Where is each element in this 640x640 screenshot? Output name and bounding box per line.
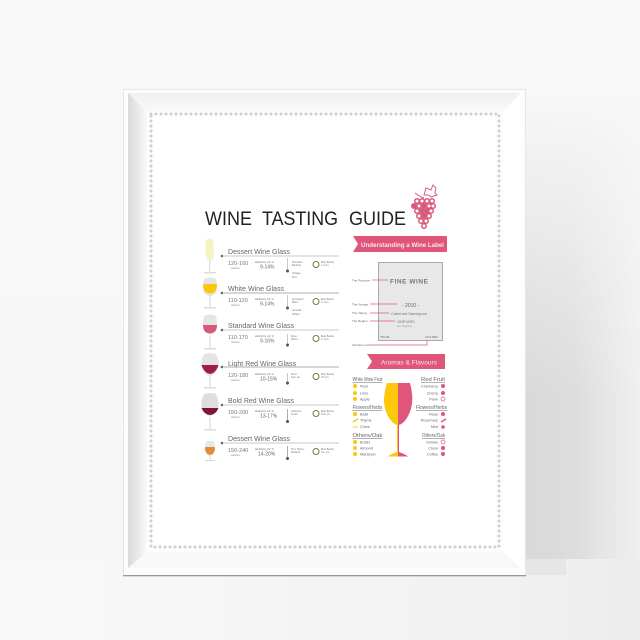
aromas: white wine column: Apple [360, 398, 370, 402]
aromas: red wine column: Rose [429, 412, 438, 416]
wall shadow beside frame [526, 96, 640, 575]
row 1 text: Vintage [292, 272, 301, 275]
aromas: red wine column: Cherry [427, 392, 438, 396]
picture frame [123, 89, 526, 576]
row 3 text [221, 321, 339, 347]
row 1 text: 1-3 yrs [321, 264, 329, 267]
wine label diagram: FINE WINE [390, 278, 429, 286]
aromas: white wine column: Flowers/Herbs [352, 405, 383, 411]
row 2 text: Sauvignon [292, 298, 304, 301]
banner: understanding a wine label: Understanding a Wine Label [361, 242, 444, 249]
row 4 text: Best Before [321, 373, 335, 376]
row 6 text: Best Before [321, 448, 335, 451]
row 5 text: Best Before [321, 410, 335, 413]
wine label diagram: VINEYARD [397, 320, 415, 324]
row 1 text: 9-14% [260, 264, 275, 270]
wine label diagram [352, 262, 442, 347]
row 1 text: Muscatos [292, 261, 303, 264]
row 4 text: Pinot [291, 373, 297, 376]
row 5 text: Cabernet [291, 410, 302, 413]
row 3 text: 1-3 yrs [321, 338, 329, 341]
aromas: red wine column: Rosemary [421, 418, 438, 422]
row 3 text: calories [231, 341, 240, 344]
row 6 text: Madeira [291, 451, 301, 454]
row 4 text: Noir, etc [291, 376, 301, 379]
aromas: red wine column: Mint [431, 425, 439, 429]
row 3 text: 110-170 [228, 335, 248, 341]
title [205, 208, 406, 230]
aromas: red wine column: Smoke [426, 440, 438, 444]
aromas: white wine column: Lime [360, 392, 368, 396]
wine label diagram: The Variety [352, 311, 368, 315]
aromas: white wine column: Basil [360, 412, 368, 416]
aromas: red wine column [416, 377, 447, 456]
title: GUIDE [349, 208, 406, 230]
row 1 text: Riesling [292, 264, 302, 267]
aromas: red wine column: Others/Oak [422, 433, 445, 439]
row 5 text: 150-200 [228, 410, 248, 416]
row 4 text: 120-180 [228, 373, 248, 379]
row 2 text: 110-120 [228, 298, 248, 304]
row 2 text: Best Before [321, 298, 335, 301]
central split wine glass [384, 383, 412, 456]
banner: understanding a wine label [353, 236, 447, 252]
aromas: red wine column: Red Fruit [421, 377, 446, 383]
row 5 text [221, 396, 339, 423]
row 2 text: White Wine Glass [228, 284, 284, 293]
row 4 text: calories [231, 379, 240, 382]
row 1 text: 120-160 [228, 261, 248, 267]
row 5 text: Bold Red Wine Glass [228, 396, 294, 405]
row 6 text: Dessert Wine Glass [228, 434, 290, 443]
aromas: white wine column: White Wine Fruit [352, 377, 383, 383]
aromas: red wine column: Plum [429, 398, 438, 402]
row 2 text: Blanc [292, 301, 299, 304]
row 4 text: 3-5 yrs [321, 376, 329, 379]
row 3 text: Wines [291, 338, 299, 341]
row 1 text [221, 247, 339, 279]
row 4 text: 10-15% [260, 376, 278, 382]
row 4 text [221, 359, 339, 385]
glass: white [203, 278, 217, 308]
row 2 text: 9-14% [260, 302, 275, 308]
row 4 text: alcohol by vol. % [255, 373, 275, 376]
wine label diagram: Est. Regional [397, 325, 412, 328]
wine label diagram: 14% ABC [425, 335, 439, 339]
row 2 text: alcohol by vol. % [255, 298, 275, 301]
wine label diagram: The Region [352, 319, 368, 323]
aromas: white wine column: Others/Oak [352, 433, 383, 439]
row 5 text: alcohol by vol. % [255, 410, 275, 413]
row 2 text [221, 284, 339, 316]
glass: standard [203, 314, 217, 350]
wine label diagram: - 2010 - [402, 303, 420, 309]
aromas: white wine column: Almond [360, 446, 373, 450]
aromas: red wine column: Cranberry [421, 384, 438, 388]
aromas: red wine column: Clove [428, 446, 438, 450]
row 3 text: alcohol by vol. % [255, 335, 275, 338]
row 3 text: 9-16% [260, 338, 275, 344]
row 1 text: calories [231, 267, 240, 270]
row 6 text: Port, Sherry [291, 448, 305, 451]
banner: aromas and flavours [367, 354, 445, 369]
banner: aromas and flavours: Aromas & Flavours [381, 360, 438, 366]
aromas: red wine column: Coffee [427, 452, 438, 456]
aromas: white wine column: Butter [360, 440, 371, 444]
row 3 text: Best Before [321, 335, 335, 338]
wine label diagram: The Producer [352, 278, 370, 282]
row 6 text: 150-240 [228, 448, 248, 454]
row 5 text: 5-10 yrs [321, 413, 331, 416]
glass: dessert (pale) [204, 238, 216, 274]
row 1 text: Port [292, 276, 297, 279]
aromas: red wine column: Flowers/Herbs [416, 405, 447, 411]
aromas: white wine column: Thyme [360, 418, 372, 422]
aromas: white wine column: Marzipan [360, 452, 376, 456]
icon: grapes [411, 185, 437, 229]
aromas: white wine column: Pear [360, 384, 369, 388]
title: WINE [205, 208, 252, 230]
row 6 text: calories [231, 454, 240, 457]
row 4 text: Light Red Wine Glass [228, 359, 296, 368]
title: TASTING [262, 208, 338, 230]
row 1 text: alcohol by vol. % [255, 261, 275, 264]
row 2 text: calories [231, 304, 240, 307]
glass: dessert (amber) [205, 441, 215, 461]
row 6 text [221, 434, 339, 460]
row 6 text: 14-20% [258, 452, 276, 458]
row 5 text: Syrah [291, 413, 298, 416]
shelf surface [0, 559, 640, 640]
wine label diagram: Alcohol Level [352, 343, 370, 347]
wine label diagram: The Vintage [352, 302, 368, 306]
aromas: white wine column: Chive [360, 425, 370, 429]
row 5 text: 13-17% [260, 414, 278, 420]
row 1 text: Dessert Wine Glass [228, 247, 290, 256]
wine label diagram: 750 ML [380, 335, 390, 339]
row 5 text: calories [231, 416, 240, 419]
glass: light red [201, 353, 219, 388]
row 2 text: 1-3 yrs [321, 301, 329, 304]
aromas: white wine column [352, 377, 383, 456]
row 3 text: Rosé [291, 335, 297, 338]
row 3 text: Standard Wine Glass [228, 321, 294, 330]
row 1 text: Best Before [321, 261, 335, 264]
wine label diagram: Cabernet Sauvignon [391, 312, 427, 316]
row 6 text: 10+ yrs [321, 451, 330, 454]
row 2 text: Whites [292, 313, 300, 316]
row 6 text: alcohol by vol. % [255, 448, 275, 451]
row 2 text: Aromatic [292, 309, 303, 312]
glass: bold red [201, 393, 219, 430]
